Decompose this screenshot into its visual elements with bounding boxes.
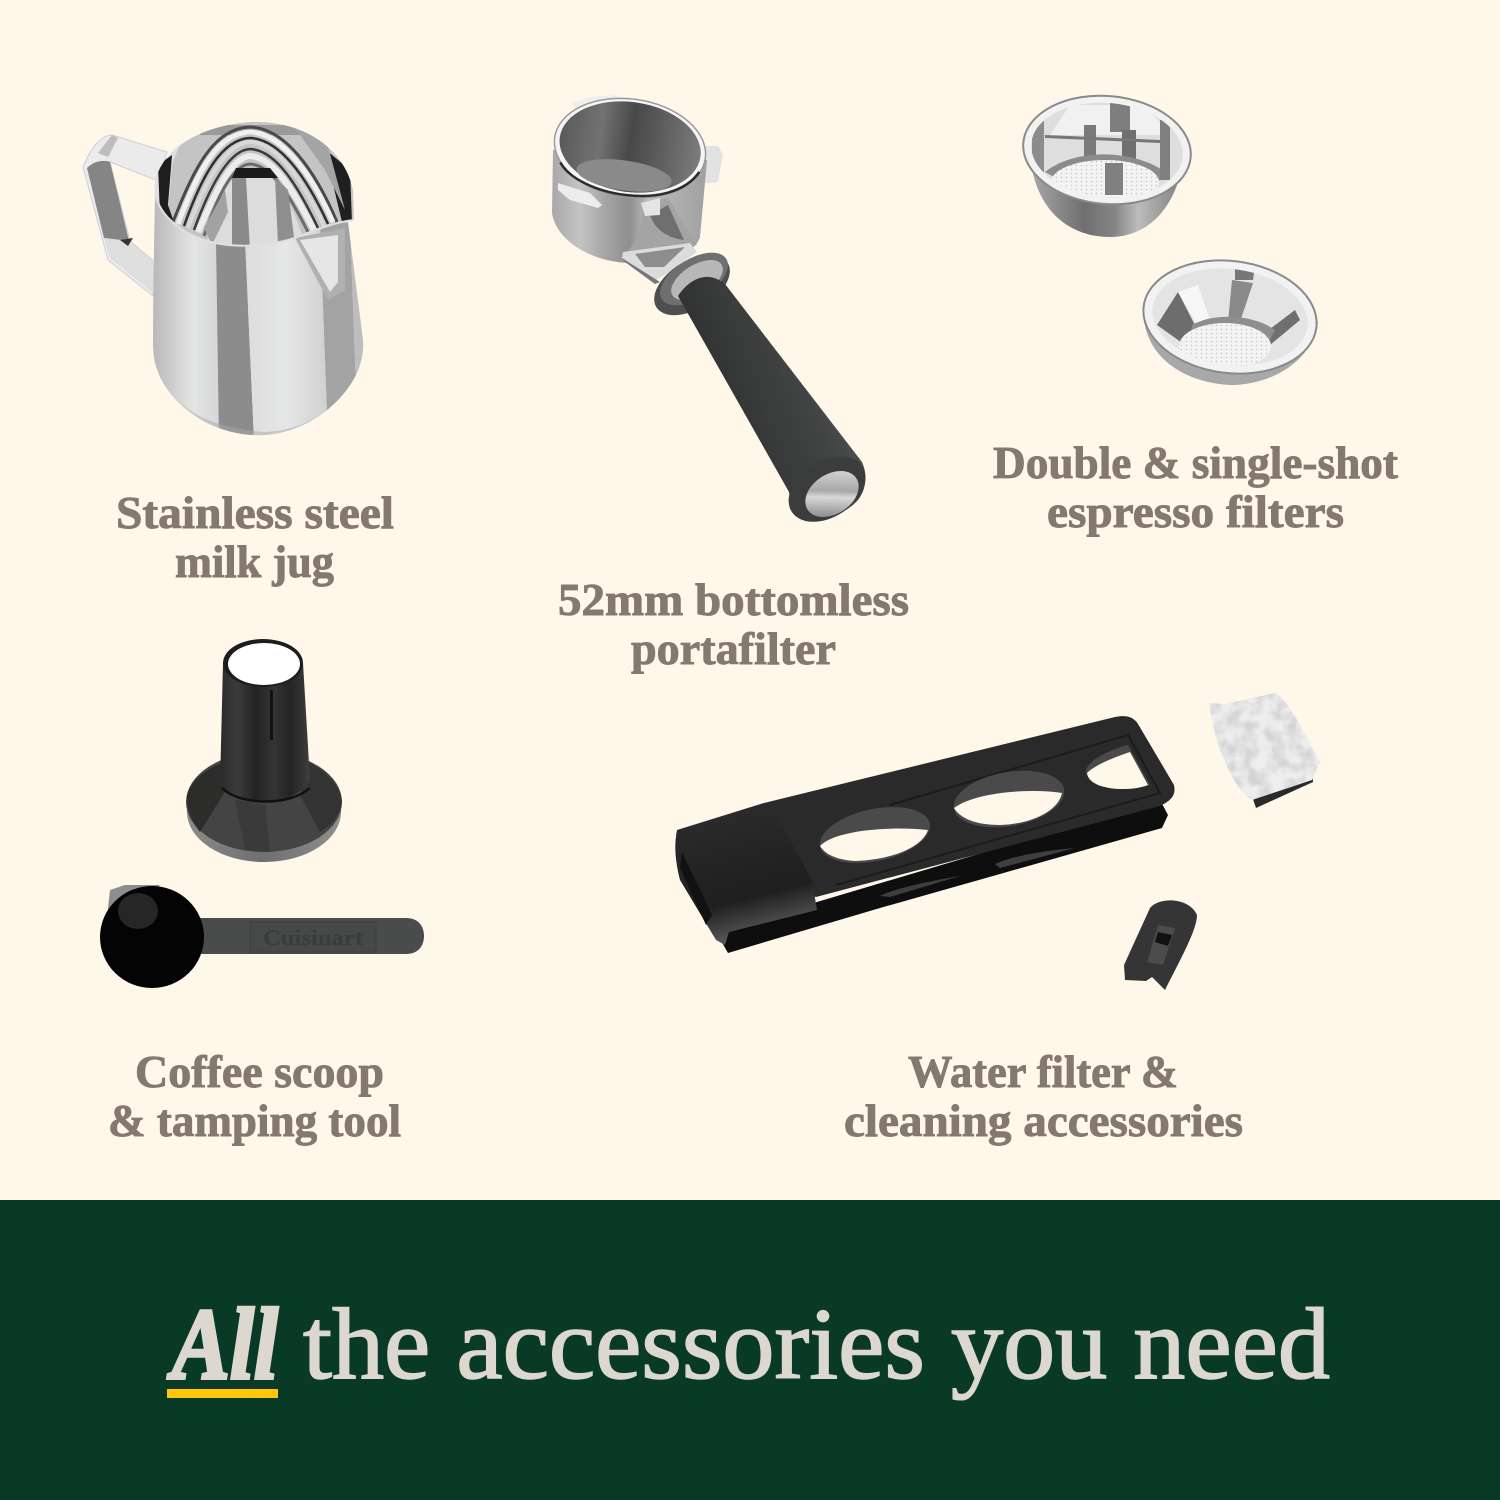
interior [1031,102,1183,198]
label: stainless steel milk jug [116,487,394,587]
label: espresso filters: Double & single-shot [993,437,1399,488]
handle end cap [777,443,877,535]
collar [644,242,740,328]
jug handle [83,135,167,296]
title: the accessories you need [303,1288,1330,1401]
hole 3 [1086,745,1150,789]
tool slot [1147,925,1175,965]
scoop back rim [105,885,160,935]
label: water filter and cleaning accessories: cleaning accessories [844,1095,1243,1146]
label: portafilter: portafilter [631,623,836,674]
top ear [573,95,625,118]
outer basket [1030,150,1184,237]
hole 2 [949,763,1069,835]
tamper base [186,752,342,852]
tamper base edge [187,762,341,862]
icon: water filter pad [1209,693,1320,808]
label: stainless steel milk jug: milk jug [175,536,334,587]
label: water filter and cleaning accessories [844,1046,1243,1146]
spout neck [622,198,697,284]
tamper shaft [220,663,310,802]
icon: double-shot espresso filter [1019,89,1195,237]
embossed logo plate [250,922,376,952]
embossed logo plate: Cuisinart [263,925,364,950]
outer basket [1144,320,1318,385]
title: All [167,1288,279,1401]
icon: 52mm bottomless portafilter [548,89,877,535]
label: scoop and tamper: & tamping tool [108,1095,401,1146]
icon: tamping tool [186,639,342,862]
icon: cleaning tool [1124,900,1197,990]
end connector [680,852,712,925]
icon: water filter holder [675,716,1174,953]
scoop handle [200,918,424,954]
rim [1137,251,1323,383]
jug body [150,190,366,445]
pad strip [1250,770,1313,808]
hole 1 [815,798,935,872]
icon: single-shot espresso filter [1142,259,1318,385]
main face [764,716,1174,897]
icon: stainless steel milk jug [83,118,366,445]
portafilter cup body [552,150,707,263]
pad [1209,693,1320,800]
label: portafilter [558,574,909,674]
lower shadow body [716,800,1168,953]
base facets [187,762,342,852]
label: stainless steel milk jug: Stainless steel [116,487,394,538]
jug rim and spout lip [155,193,354,246]
interior [1152,268,1308,366]
icon: coffee scoop [100,885,424,988]
label: scoop and tamper [108,1046,401,1146]
handle [678,277,865,521]
scoop bowl [100,886,204,988]
label: portafilter: 52mm bottomless [558,574,909,625]
tool body [1124,900,1197,990]
bowl reflection [118,893,158,929]
label: espresso filters: espresso filters [1047,486,1344,537]
left ear [558,183,602,208]
title underline [167,1389,278,1398]
tamper top [223,639,303,687]
banner: footer [0,1200,1500,1500]
label: water filter and cleaning accessories: Water filter & [908,1046,1178,1097]
rim [1019,89,1195,211]
label: scoop and tamper: Coffee scoop [135,1046,384,1097]
cup rim and interior [548,89,712,207]
under discs [880,876,960,897]
label: espresso filters [993,437,1399,537]
right ear [695,146,723,184]
left block [675,803,817,945]
frame inner line [836,735,1160,885]
jug interior reflections [154,122,354,245]
